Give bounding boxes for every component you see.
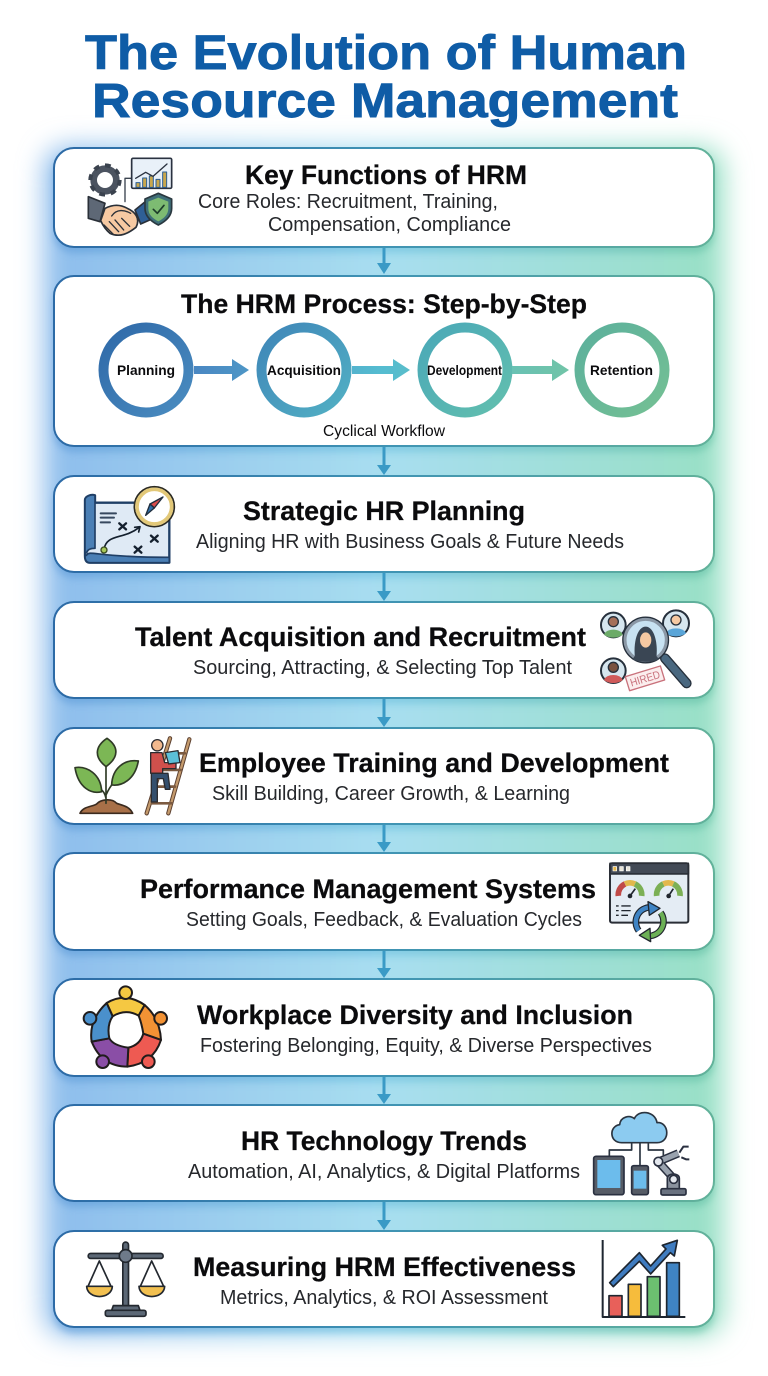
arrow: acquisition to development <box>352 359 410 381</box>
heading: employee training: Employee Training and Development <box>199 748 669 778</box>
step: planning <box>104 328 188 412</box>
text: measuring description: Metrics, Analytics, & ROI Assessment <box>220 1287 548 1309</box>
icon: puzzle circle of people <box>84 986 167 1068</box>
step: development <box>422 328 508 412</box>
arrow: key functions to process <box>377 247 391 274</box>
card drop shadows <box>54 154 714 1333</box>
text: core roles: Compensation, Compliance <box>268 214 511 236</box>
background glow <box>44 146 724 1336</box>
text: planning description: Aligning HR with Business Goals & Future Needs <box>196 531 624 553</box>
arrow: diversity to technology <box>377 1076 391 1104</box>
text: core roles: Core Roles: Recruitment, Training, <box>198 191 498 213</box>
arrow: talent to training <box>377 698 391 727</box>
heading: performance management: Performance Management Systems <box>140 874 596 904</box>
panel: performance management <box>54 853 714 950</box>
heading: talent acquisition: Talent Acquisition and Recruitment <box>135 622 586 652</box>
panel: strategic HR planning <box>54 476 714 572</box>
panel: HRM process <box>54 276 714 446</box>
title: Resource Management <box>92 75 678 128</box>
text: diversity description: Fostering Belonging, Equity, & Diverse Perspectives <box>200 1035 652 1057</box>
arrow: performance to diversity <box>377 950 391 978</box>
icon: dashboard gauges and refresh <box>610 863 688 942</box>
panel: employee training <box>54 728 714 824</box>
icon: rising bar chart <box>603 1240 685 1317</box>
heading: technology trends: HR Technology Trends <box>241 1126 527 1156</box>
icon: cloud, devices and robot arm <box>594 1113 689 1195</box>
title: The Evolution of Human <box>85 27 687 80</box>
icon: gear, chart, handshake and shield <box>88 158 172 235</box>
panel: key functions of HRM <box>54 148 714 247</box>
step: development: Development <box>427 362 502 378</box>
step: acquisition <box>262 328 346 412</box>
icon: magnifier, candidates and hired stamp: HIRED <box>629 669 662 690</box>
panel: HR technology trends <box>54 1105 714 1201</box>
title <box>85 27 687 128</box>
step: planning: Planning <box>117 362 175 378</box>
text: training description: Skill Building, Career Growth, & Learning <box>212 783 570 805</box>
arrow: planning to acquisition <box>194 359 249 381</box>
caption: cyclical workflow: Cyclical Workflow <box>323 423 445 440</box>
heading: strategic planning: Strategic HR Planning <box>243 496 525 526</box>
text: technology description: Automation, AI, Analytics, & Digital Platforms <box>188 1161 580 1183</box>
step: retention <box>580 328 664 412</box>
panel: talent acquisition <box>54 602 714 698</box>
arrow: process to planning <box>377 446 391 475</box>
icon: plant and ladder <box>75 738 189 813</box>
arrow: planning to talent <box>377 572 391 601</box>
arrow: technology to measuring <box>377 1201 391 1230</box>
arrow: training to performance <box>377 824 391 852</box>
heading: key functions: Key Functions of HRM <box>245 160 527 190</box>
heading: diversity and inclusion: Workplace Diversity and Inclusion <box>197 1000 633 1030</box>
icon: magnifier, candidates and hired stamp <box>601 610 689 691</box>
text: talent description: Sourcing, Attracting, & Selecting Top Talent <box>193 657 572 679</box>
icon: map and compass <box>85 487 174 563</box>
icon: balance scale <box>87 1245 165 1316</box>
heading: HRM process: The HRM Process: Step-by-Step <box>181 289 587 319</box>
panel: measuring effectiveness <box>54 1231 714 1327</box>
step: retention: Retention <box>590 362 653 378</box>
heading: measuring effectiveness: Measuring HRM Effectiveness <box>193 1252 576 1282</box>
panel: diversity and inclusion <box>54 979 714 1076</box>
arrow: development to retention <box>512 359 569 381</box>
text: core roles <box>198 191 511 236</box>
step: acquisition: Acquisition <box>267 362 341 378</box>
text: performance description: Setting Goals, Feedback, & Evaluation Cycles <box>186 909 582 931</box>
